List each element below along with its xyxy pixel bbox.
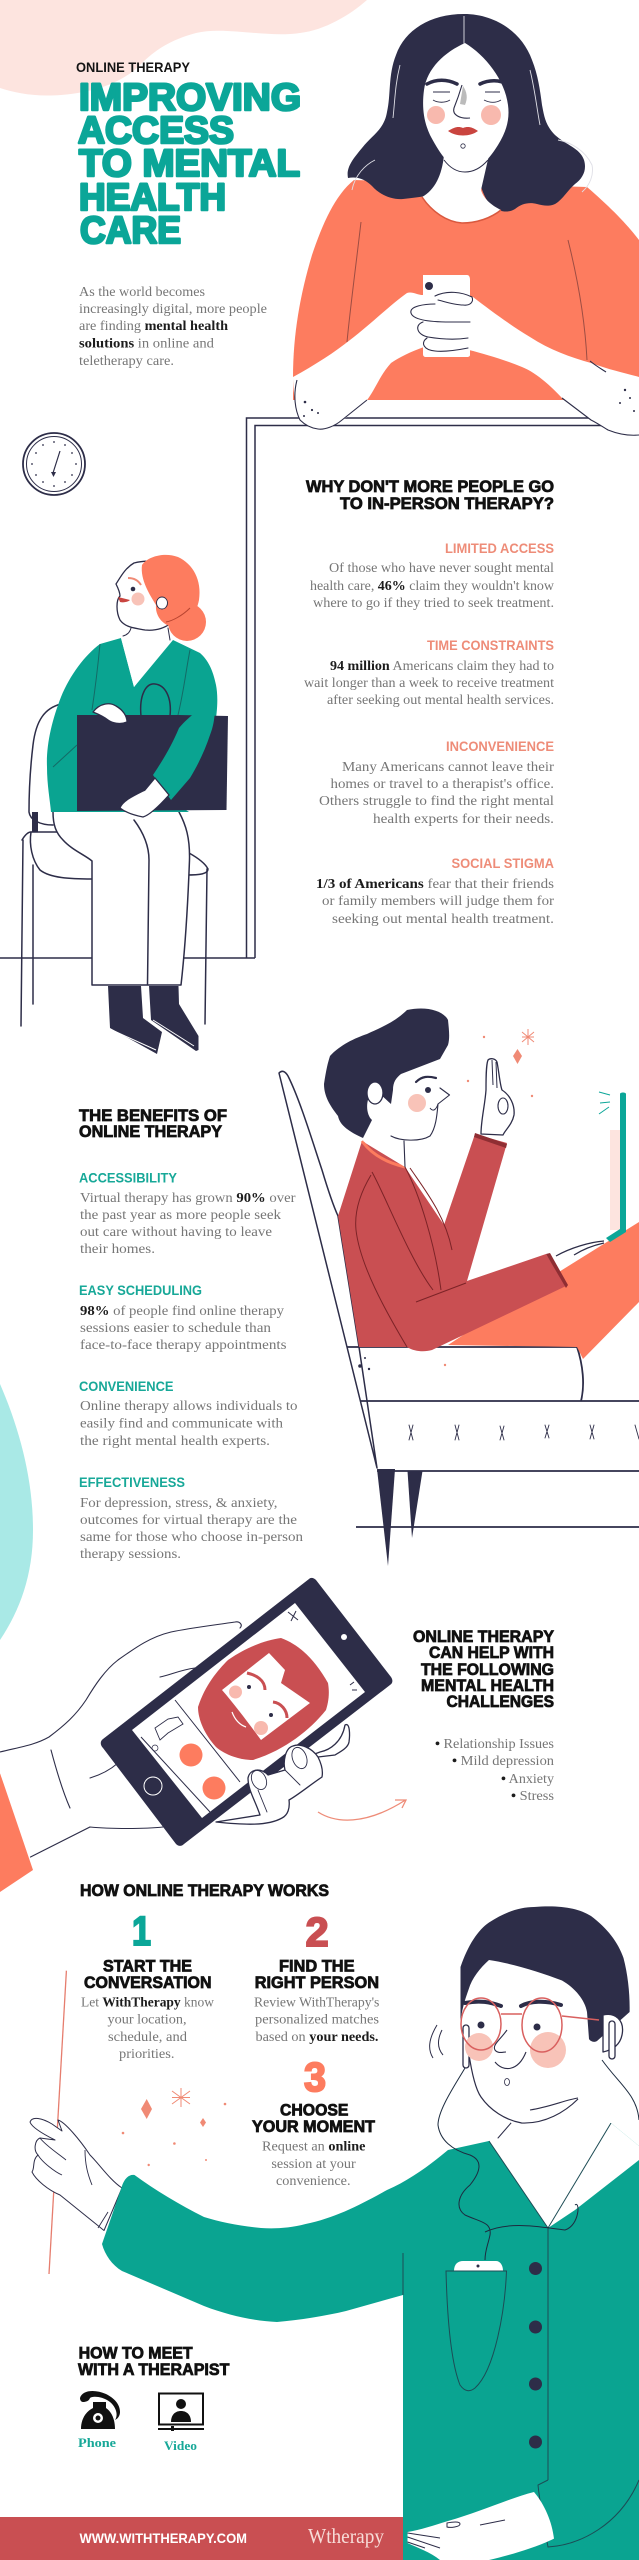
heading: TO IN-PERSON THERAPY?	[340, 494, 554, 513]
teal background blob	[0, 1384, 33, 1640]
intro paragraph: As the world becomes	[79, 285, 205, 300]
pointing hand	[30, 2118, 122, 2230]
on-screen person: hair	[198, 1638, 329, 1760]
room frame lines	[0, 418, 639, 958]
blush	[465, 2033, 493, 2061]
hand	[0, 1622, 241, 1857]
lips	[448, 127, 478, 136]
sweater lines	[53, 644, 190, 767]
illustration: man in chair with laptop	[279, 1008, 639, 1566]
pink background blob	[0, 0, 367, 96]
pocket	[446, 2271, 506, 2391]
challenge list: • Anxiety	[501, 1772, 554, 1787]
sweater	[338, 1134, 566, 1351]
sleeve over bag	[153, 700, 215, 800]
toolbar lines	[141, 1700, 240, 1812]
intro paragraph: increasingly digital, more people	[79, 302, 267, 317]
main title: IMPROVING	[79, 77, 301, 119]
eyebrows	[465, 2002, 561, 2006]
neck	[422, 155, 501, 223]
reason: limited access: Of those who have never sought mental	[329, 561, 554, 576]
trousers	[53, 812, 190, 985]
heading: MENTAL HEALTH	[421, 1676, 554, 1695]
chair	[21, 704, 208, 1026]
reason: inconvenience	[319, 738, 554, 827]
reason: limited access: where to go if they tried to seek treatment.	[313, 596, 554, 611]
benefit: effectiveness: For depression, stress, & anxiety,	[80, 1496, 278, 1511]
benefit: easy scheduling	[79, 1282, 286, 1353]
benefit: effectiveness	[79, 1474, 303, 1562]
nose	[454, 85, 470, 118]
trousers	[448, 1222, 639, 1359]
bag	[77, 715, 228, 811]
benefit: easy scheduling: face-to-face therapy appointments	[80, 1338, 286, 1353]
step 1: Let WithTherapy know	[81, 1996, 215, 2010]
step 2: RIGHT PERSON	[255, 1973, 379, 1992]
reason: time constraints: after seeking out mental health services.	[327, 693, 554, 708]
reason: time constraints: wait longer than a week to receive treatment	[304, 676, 554, 691]
reason: inconvenience: health experts for their needs.	[373, 812, 554, 827]
challenge list: • Mild depression	[452, 1754, 554, 1769]
benefit: easy scheduling: sessions easier to schedule than	[80, 1321, 271, 1336]
intro paragraph: teletherapy care.	[79, 354, 174, 369]
benefit: convenience: Online therapy allows individuals to	[80, 1399, 298, 1414]
neck	[121, 628, 171, 687]
forearm edges and freckles	[295, 361, 639, 435]
raised hand	[481, 1059, 514, 1135]
home button	[144, 1777, 162, 1795]
resting hand	[408, 2492, 554, 2560]
benefit: accessibility: out care without having to leave	[80, 1225, 272, 1240]
step 2: 2	[306, 1909, 329, 1955]
panel: mental health challenges	[413, 1627, 555, 1804]
bag handle	[141, 684, 170, 716]
heading: THE BENEFITS OF	[79, 1106, 227, 1125]
icon: video call	[158, 2394, 204, 2431]
chair legs	[377, 1469, 395, 1566]
earphone wire	[438, 2060, 639, 2260]
seat stitches	[409, 1425, 639, 1440]
thumbs-up sticker	[155, 1717, 183, 1740]
panel: how online therapy works	[80, 1881, 379, 2189]
panel: why people avoid in-person therapy	[304, 477, 555, 927]
neck and jaw fill	[511, 2080, 611, 2123]
step 3: YOUR MOMENT	[252, 2117, 376, 2136]
hair	[142, 555, 200, 627]
cheek	[408, 1094, 426, 1112]
collar	[362, 1141, 405, 1167]
neck and face	[363, 1063, 450, 1167]
main title	[78, 77, 301, 252]
eyebrows	[427, 80, 508, 85]
call buttons	[180, 1744, 202, 1766]
reason: social stigma: SOCIAL STIGMA	[452, 855, 554, 871]
ear	[367, 1082, 383, 1104]
fingers over phone	[216, 1745, 322, 1824]
illustration: hand holding phone on video call	[0, 1578, 392, 1857]
heading	[413, 1627, 555, 1711]
shirt	[293, 180, 639, 400]
finger nails	[248, 1745, 310, 1812]
shirt fold lines	[347, 222, 587, 360]
sweater	[47, 638, 217, 812]
label: phone: Phone	[78, 2435, 116, 2450]
head	[116, 561, 188, 630]
benefit: convenience	[79, 1378, 298, 1449]
phone screen	[132, 1603, 365, 1818]
sweater lines	[356, 1167, 466, 1347]
mole	[504, 2078, 510, 2086]
footer logo: Wtherapy	[308, 2524, 384, 2548]
step 3: convenience.	[276, 2174, 350, 2189]
reason: time constraints	[304, 637, 554, 708]
main title: HEALTH	[79, 177, 226, 219]
eyes	[478, 2022, 484, 2028]
pointer line	[49, 1971, 66, 2274]
collar line	[422, 197, 501, 223]
heading: CHALLENGES	[446, 1692, 554, 1711]
hands	[93, 704, 127, 723]
heading: ONLINE THERAPY	[79, 1122, 223, 1141]
earbuds	[609, 2021, 615, 2059]
step 3: Request an online	[262, 2140, 366, 2154]
illustration: man with glasses pointing	[30, 1906, 639, 2560]
face	[423, 43, 509, 172]
challenge list: • Stress	[511, 1789, 554, 1804]
reason: inconvenience: homes or travel to a therapist's office.	[330, 777, 554, 792]
intro paragraph: are finding mental health	[79, 319, 228, 334]
shirt buttons	[529, 2262, 542, 2448]
neck outline	[498, 2123, 511, 2138]
fingers	[411, 292, 473, 351]
heading	[79, 1106, 227, 1141]
heading: WHY DON'T MORE PEOPLE GO	[306, 477, 554, 496]
face details	[118, 597, 130, 602]
footer website: WWW.WITHTHERAPY.COM	[80, 2530, 247, 2546]
arms	[293, 292, 639, 435]
benefit: easy scheduling: 98% of people find online therapy	[80, 1304, 284, 1319]
benefit: accessibility	[79, 1170, 296, 1257]
arrow	[318, 1800, 406, 1820]
hair bun	[168, 603, 206, 641]
step 1: CONVERSATION	[84, 1973, 212, 1992]
benefit: accessibility: the past year as more people seek	[80, 1208, 281, 1223]
reason: limited access	[310, 540, 555, 611]
icon: wall clock	[23, 433, 85, 495]
eye and brow	[425, 1087, 431, 1093]
step 2: FIND THE	[279, 1957, 354, 1976]
challenge list: • Relationship Issues	[435, 1737, 554, 1752]
boots	[108, 986, 162, 1054]
sparkles	[444, 1029, 534, 1366]
laptop	[610, 1130, 620, 1230]
close icon	[288, 1611, 298, 1621]
hair	[460, 1906, 630, 2042]
blush	[427, 106, 445, 124]
step 2: personalized matches	[255, 2012, 379, 2028]
heading: HOW TO MEET	[79, 2344, 193, 2363]
benefit: convenience: easily find and communicate with	[80, 1416, 283, 1432]
panel: how to meet with a therapist	[78, 2344, 230, 2453]
intro paragraph: solutions in online and	[79, 336, 214, 352]
heading: ONLINE THERAPY	[413, 1627, 555, 1646]
eyebrow label: ONLINE THERAPY	[76, 59, 191, 75]
cuff	[538, 2480, 639, 2547]
benefit: accessibility: Virtual therapy has grown 90% over	[80, 1191, 296, 1206]
fullscreen icon	[350, 1682, 357, 1690]
heading: HOW ONLINE THERAPY WORKS	[80, 1881, 329, 1900]
hand on keyboard	[556, 1241, 604, 1256]
main title: ACCESS	[78, 110, 234, 152]
on-screen person: face	[222, 1653, 310, 1740]
heading: CAN HELP WITH	[429, 1643, 554, 1662]
hair parting	[352, 16, 593, 192]
step 2	[254, 1909, 379, 2045]
label: video: Video	[164, 2438, 197, 2453]
hair	[324, 1008, 449, 1138]
benefit: convenience: the right mental health experts.	[80, 1434, 270, 1449]
step 2: Review WithTherapy's	[254, 1996, 379, 2010]
reason: limited access: LIMITED ACCESS	[445, 540, 554, 556]
freckles	[358, 1357, 370, 1370]
ear	[603, 2014, 623, 2052]
step 3: session at your	[271, 2157, 356, 2172]
step 1: priorities.	[119, 2047, 174, 2062]
main title: TO MENTAL	[79, 143, 300, 185]
heading: THE FOLLOWING	[421, 1660, 554, 1679]
benefit: effectiveness: therapy sessions.	[80, 1547, 181, 1562]
panel: benefits of online therapy	[79, 1106, 303, 1562]
benefit: effectiveness: same for those who choose in-person	[80, 1530, 303, 1545]
step 3: CHOOSE	[280, 2100, 348, 2120]
step 1: your location,	[108, 2012, 186, 2028]
ear	[156, 597, 168, 609]
reason: social stigma: seeking out mental health treatment.	[332, 912, 554, 927]
reason: social stigma: or family members will judge them for	[322, 894, 554, 909]
benefit: effectiveness: EFFECTIVENESS	[79, 1474, 185, 1490]
footer bar	[0, 2517, 639, 2560]
reason: inconvenience: Many Americans cannot leave their	[342, 760, 554, 775]
nose and smile	[494, 2030, 578, 2110]
chair back	[279, 1071, 377, 1468]
step 2: based on your needs.	[256, 2030, 378, 2045]
reason: time constraints: TIME CONSTRAINTS	[427, 637, 554, 653]
challenge list	[435, 1737, 554, 1804]
step 3	[252, 2054, 376, 2189]
illustration: woman holding phone	[293, 14, 639, 435]
reason: limited access: health care, 46% claim they wouldn't know	[310, 579, 555, 594]
illustration: seated woman with bag	[21, 555, 228, 1054]
phone	[423, 275, 470, 357]
reason: social stigma	[316, 855, 554, 927]
step 3: 3	[304, 2054, 326, 2100]
reason: inconvenience: INCONVENIENCE	[446, 738, 554, 754]
sparkles	[122, 2088, 226, 2166]
glasses	[461, 1998, 599, 2052]
reason: social stigma: 1/3 of Americans fear that their friends	[316, 877, 554, 892]
orange sleeve shape	[0, 1773, 33, 1892]
camera	[341, 1634, 347, 1640]
icon: telephone	[80, 2391, 120, 2429]
on-screen person: features	[247, 1673, 287, 1718]
heading: WITH A THERAPIST	[78, 2360, 230, 2379]
step 1	[81, 1908, 215, 2062]
benefit: effectiveness: outcomes for virtual therapy are the	[80, 1513, 297, 1528]
reason: inconvenience: Others struggle to find the right mental	[319, 794, 554, 809]
benefit: accessibility: their homes.	[80, 1242, 155, 1257]
benefit: accessibility: ACCESSIBILITY	[79, 1170, 178, 1186]
step 1: START THE	[103, 1957, 192, 1976]
reason: time constraints: 94 million Americans claim they had to	[330, 659, 554, 674]
phone in pocket	[454, 2261, 503, 2271]
sound lines	[430, 2025, 443, 2058]
heading	[306, 477, 554, 513]
collar	[489, 2123, 639, 2228]
far finger over phone	[312, 1725, 350, 1757]
main title: CARE	[80, 210, 181, 252]
chair seat lines	[347, 1347, 639, 1527]
benefit: easy scheduling: EASY SCHEDULING	[79, 1282, 202, 1298]
step 1: 1	[132, 1908, 151, 1954]
shirt	[102, 2123, 639, 2560]
face	[466, 1950, 603, 2123]
eyes	[433, 92, 501, 102]
benefit: convenience: CONVENIENCE	[79, 1378, 174, 1394]
header block	[76, 59, 301, 369]
hair	[348, 14, 585, 212]
cuffs	[474, 1133, 568, 1288]
heading	[78, 2344, 230, 2379]
step 1: schedule, and	[108, 2030, 187, 2045]
phone body	[101, 1578, 392, 1846]
intro paragraph	[79, 285, 267, 369]
